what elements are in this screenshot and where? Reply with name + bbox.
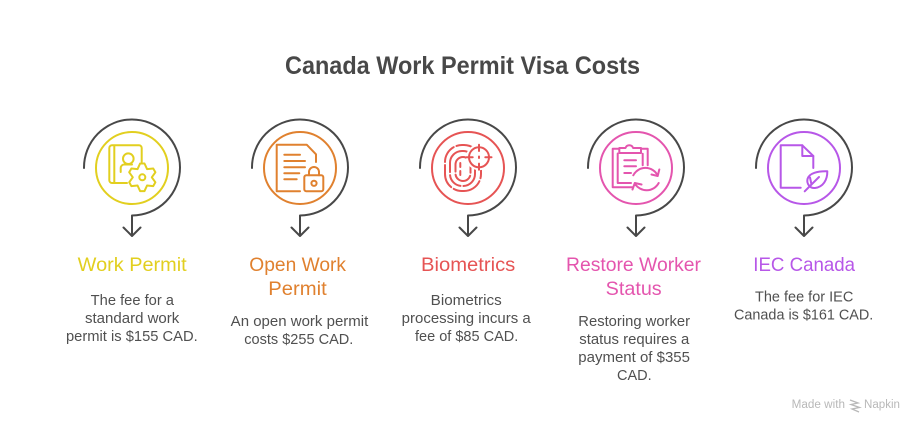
watermark: Made with Napkin: Made with <box>792 399 845 411</box>
heading: Biometrics: Biometrics <box>421 254 516 276</box>
icon: work permit book and gear <box>84 120 180 236</box>
text: IEC Canada description <box>734 290 873 324</box>
panel: Work Permit <box>66 120 198 345</box>
text: Open Work Permit description <box>231 314 368 348</box>
text: Restore Worker Status description <box>578 314 690 384</box>
text: Work Permit description: permit is $155 CAD. <box>66 329 198 345</box>
heading: Restore Worker Status: Status <box>606 278 662 300</box>
text: Restore Worker Status description: Restoring worker <box>578 314 690 330</box>
text: Restore Worker Status description: CAD. <box>617 368 652 384</box>
heading: Open Work Permit <box>249 254 346 300</box>
title: Canada Work Permit Visa Costs <box>285 52 640 80</box>
text: Work Permit description: The fee for a <box>91 293 175 309</box>
text: Biometrics description: fee of $85 CAD. <box>415 329 518 345</box>
text: IEC Canada description: Canada is $161 CAD. <box>734 308 873 324</box>
heading: Open Work Permit: Open Work <box>249 254 346 276</box>
panel: Biometrics <box>402 120 532 345</box>
watermark: Made with Napkin: Napkin <box>864 399 900 411</box>
text: Work Permit description <box>66 293 198 345</box>
heading: Work Permit: Work Permit <box>78 254 187 276</box>
icon: document with leaf <box>756 120 852 236</box>
text: Open Work Permit description: costs $255 CAD. <box>244 332 353 348</box>
text: Open Work Permit description: An open work permit <box>231 314 368 330</box>
text: Work Permit description: standard work <box>85 311 180 327</box>
heading: IEC Canada: IEC Canada <box>753 254 855 276</box>
heading: Open Work Permit: Permit <box>268 278 327 300</box>
icon: document with padlock <box>252 120 348 236</box>
text: Biometrics description <box>402 293 532 345</box>
heading: Restore Worker Status: Restore Worker <box>566 254 701 276</box>
watermark: Made with Napkin <box>792 399 900 412</box>
text: Restore Worker Status description: payment of $355 <box>578 350 690 366</box>
panel: IEC Canada <box>734 120 873 324</box>
panel: Open Work Permit <box>231 120 368 348</box>
text: Biometrics description: Biometrics <box>431 293 502 309</box>
icon: fingerprint with target <box>420 120 516 236</box>
text: IEC Canada description: The fee for IEC <box>755 290 853 306</box>
text: Restore Worker Status description: status requires a <box>579 332 690 348</box>
icon: clipboard with refresh arrows <box>588 120 684 236</box>
text: Biometrics description: processing incurs a <box>402 311 532 327</box>
heading: Restore Worker Status <box>566 254 701 300</box>
panel: Restore Worker Status <box>566 120 701 384</box>
